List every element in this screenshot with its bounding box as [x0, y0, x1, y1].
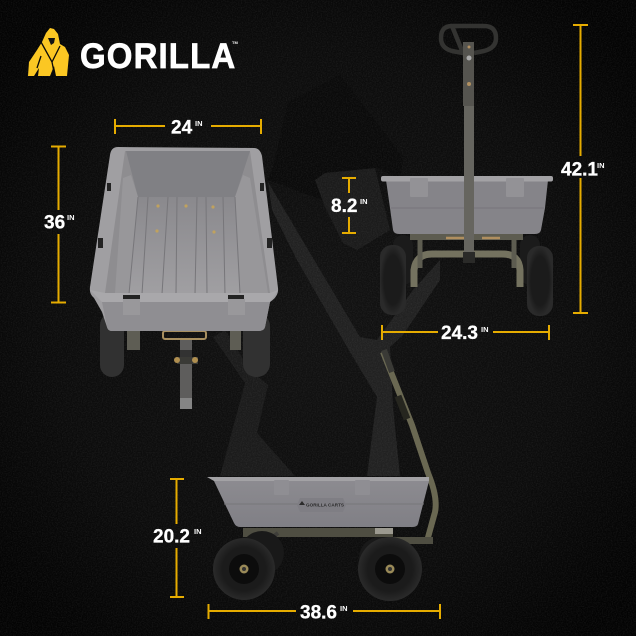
dimension: 38.6 in length: IN [340, 604, 348, 613]
dimension: 36 in depth [44, 146, 74, 302]
dimension: 42.1 in height: 42.1 [561, 160, 598, 180]
dimension: 20.2 in height: IN [194, 527, 202, 536]
floor ribs [129, 197, 240, 294]
dimension: 24.3 in width [382, 323, 549, 344]
tub [207, 477, 429, 527]
dimension: 8.2 in: IN [360, 197, 368, 206]
icon: gorilla [28, 28, 69, 76]
dimension: 42.1 in height: IN [597, 161, 604, 170]
dimension: 42.1 in height [561, 25, 604, 313]
dimension: 24 in width [115, 118, 261, 138]
logo [28, 28, 238, 76]
tub [381, 176, 553, 234]
wheels [100, 313, 270, 377]
dimension: 20.2 in height [153, 479, 202, 597]
dimension: 36 in depth: IN [67, 213, 74, 222]
handle [383, 352, 436, 541]
front lip [90, 290, 278, 302]
top view cart [90, 147, 278, 409]
dimension: 24.3 in width: 24.3 [441, 323, 478, 344]
frame [243, 528, 433, 545]
dimension: 8.2 in [331, 178, 368, 233]
dimension: 36 in depth: 36 [44, 212, 65, 234]
dimension: 38.6 in length [208, 602, 440, 624]
wordmark: TM [232, 40, 238, 45]
dimension: 8.2 in: 8.2 [331, 196, 357, 217]
dimension: 20.2 in height: 20.2 [153, 526, 190, 548]
handle grip [384, 350, 392, 372]
chassis [410, 237, 523, 287]
dimension: 24 in width: IN [195, 119, 202, 128]
dimension: 24 in width: 24 [171, 118, 193, 138]
bolts [155, 204, 216, 234]
dimension: 24.3 in width: IN [481, 325, 488, 334]
side view cart [207, 350, 436, 601]
tub label: GORILLA CARTS [306, 502, 344, 508]
wheels [380, 235, 553, 316]
clips [98, 183, 272, 299]
front view cart [380, 26, 553, 316]
tub label [297, 498, 346, 512]
wheel: rear [213, 538, 275, 600]
chassis [127, 330, 241, 409]
wheel: front [358, 537, 422, 601]
handle [441, 26, 496, 263]
wordmark: GORILLA [80, 37, 236, 76]
tub [90, 147, 278, 331]
far wheels [240, 531, 401, 579]
handle brace [398, 396, 407, 419]
dimension: 38.6 in length: 38.6 [300, 602, 337, 624]
